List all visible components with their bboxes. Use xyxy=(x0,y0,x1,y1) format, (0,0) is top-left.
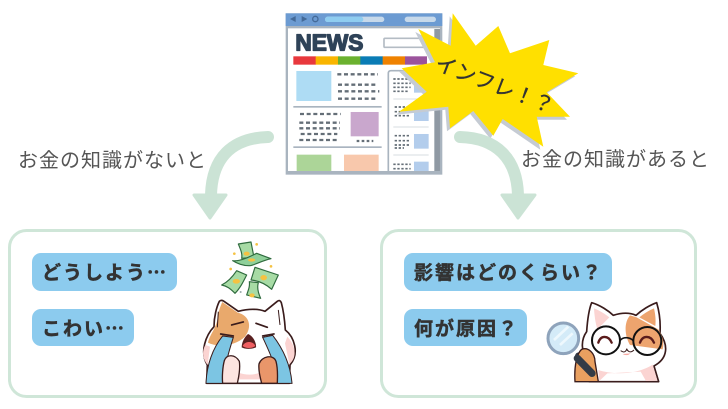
illustration: news browser window: NEWS xyxy=(295,30,363,56)
arrow: right curved arrow xyxy=(460,137,535,218)
icon: flying money xyxy=(222,242,278,298)
speech pill: what should I do: どうしよう… xyxy=(42,258,168,285)
starburst: inflation callout xyxy=(396,13,578,150)
icon: cat with glasses xyxy=(575,303,666,382)
label: with money knowledge: お金の知識があると xyxy=(521,143,710,172)
speech pill: what is the cause xyxy=(404,309,527,346)
panel: left outcome xyxy=(10,230,326,396)
speech pill: how much impact xyxy=(404,253,612,291)
speech pill: scary xyxy=(32,309,134,346)
illustration: news browser window xyxy=(286,13,442,175)
icon: crying cat xyxy=(203,300,295,383)
speech pill: how much impact: 影響はどのくらい？ xyxy=(414,258,603,285)
speech pill: what is the cause: 何が原因？ xyxy=(414,314,519,341)
speech pill: what should I do xyxy=(32,253,177,291)
label: without money knowledge: お金の知識がないと xyxy=(18,144,207,173)
speech pill: scary: こわい… xyxy=(42,314,126,341)
callout text: インフレ！？ xyxy=(431,48,559,120)
icon: magnifying glass xyxy=(548,323,592,373)
panel: right outcome xyxy=(382,230,696,396)
arrow: left curved arrow xyxy=(194,137,268,218)
